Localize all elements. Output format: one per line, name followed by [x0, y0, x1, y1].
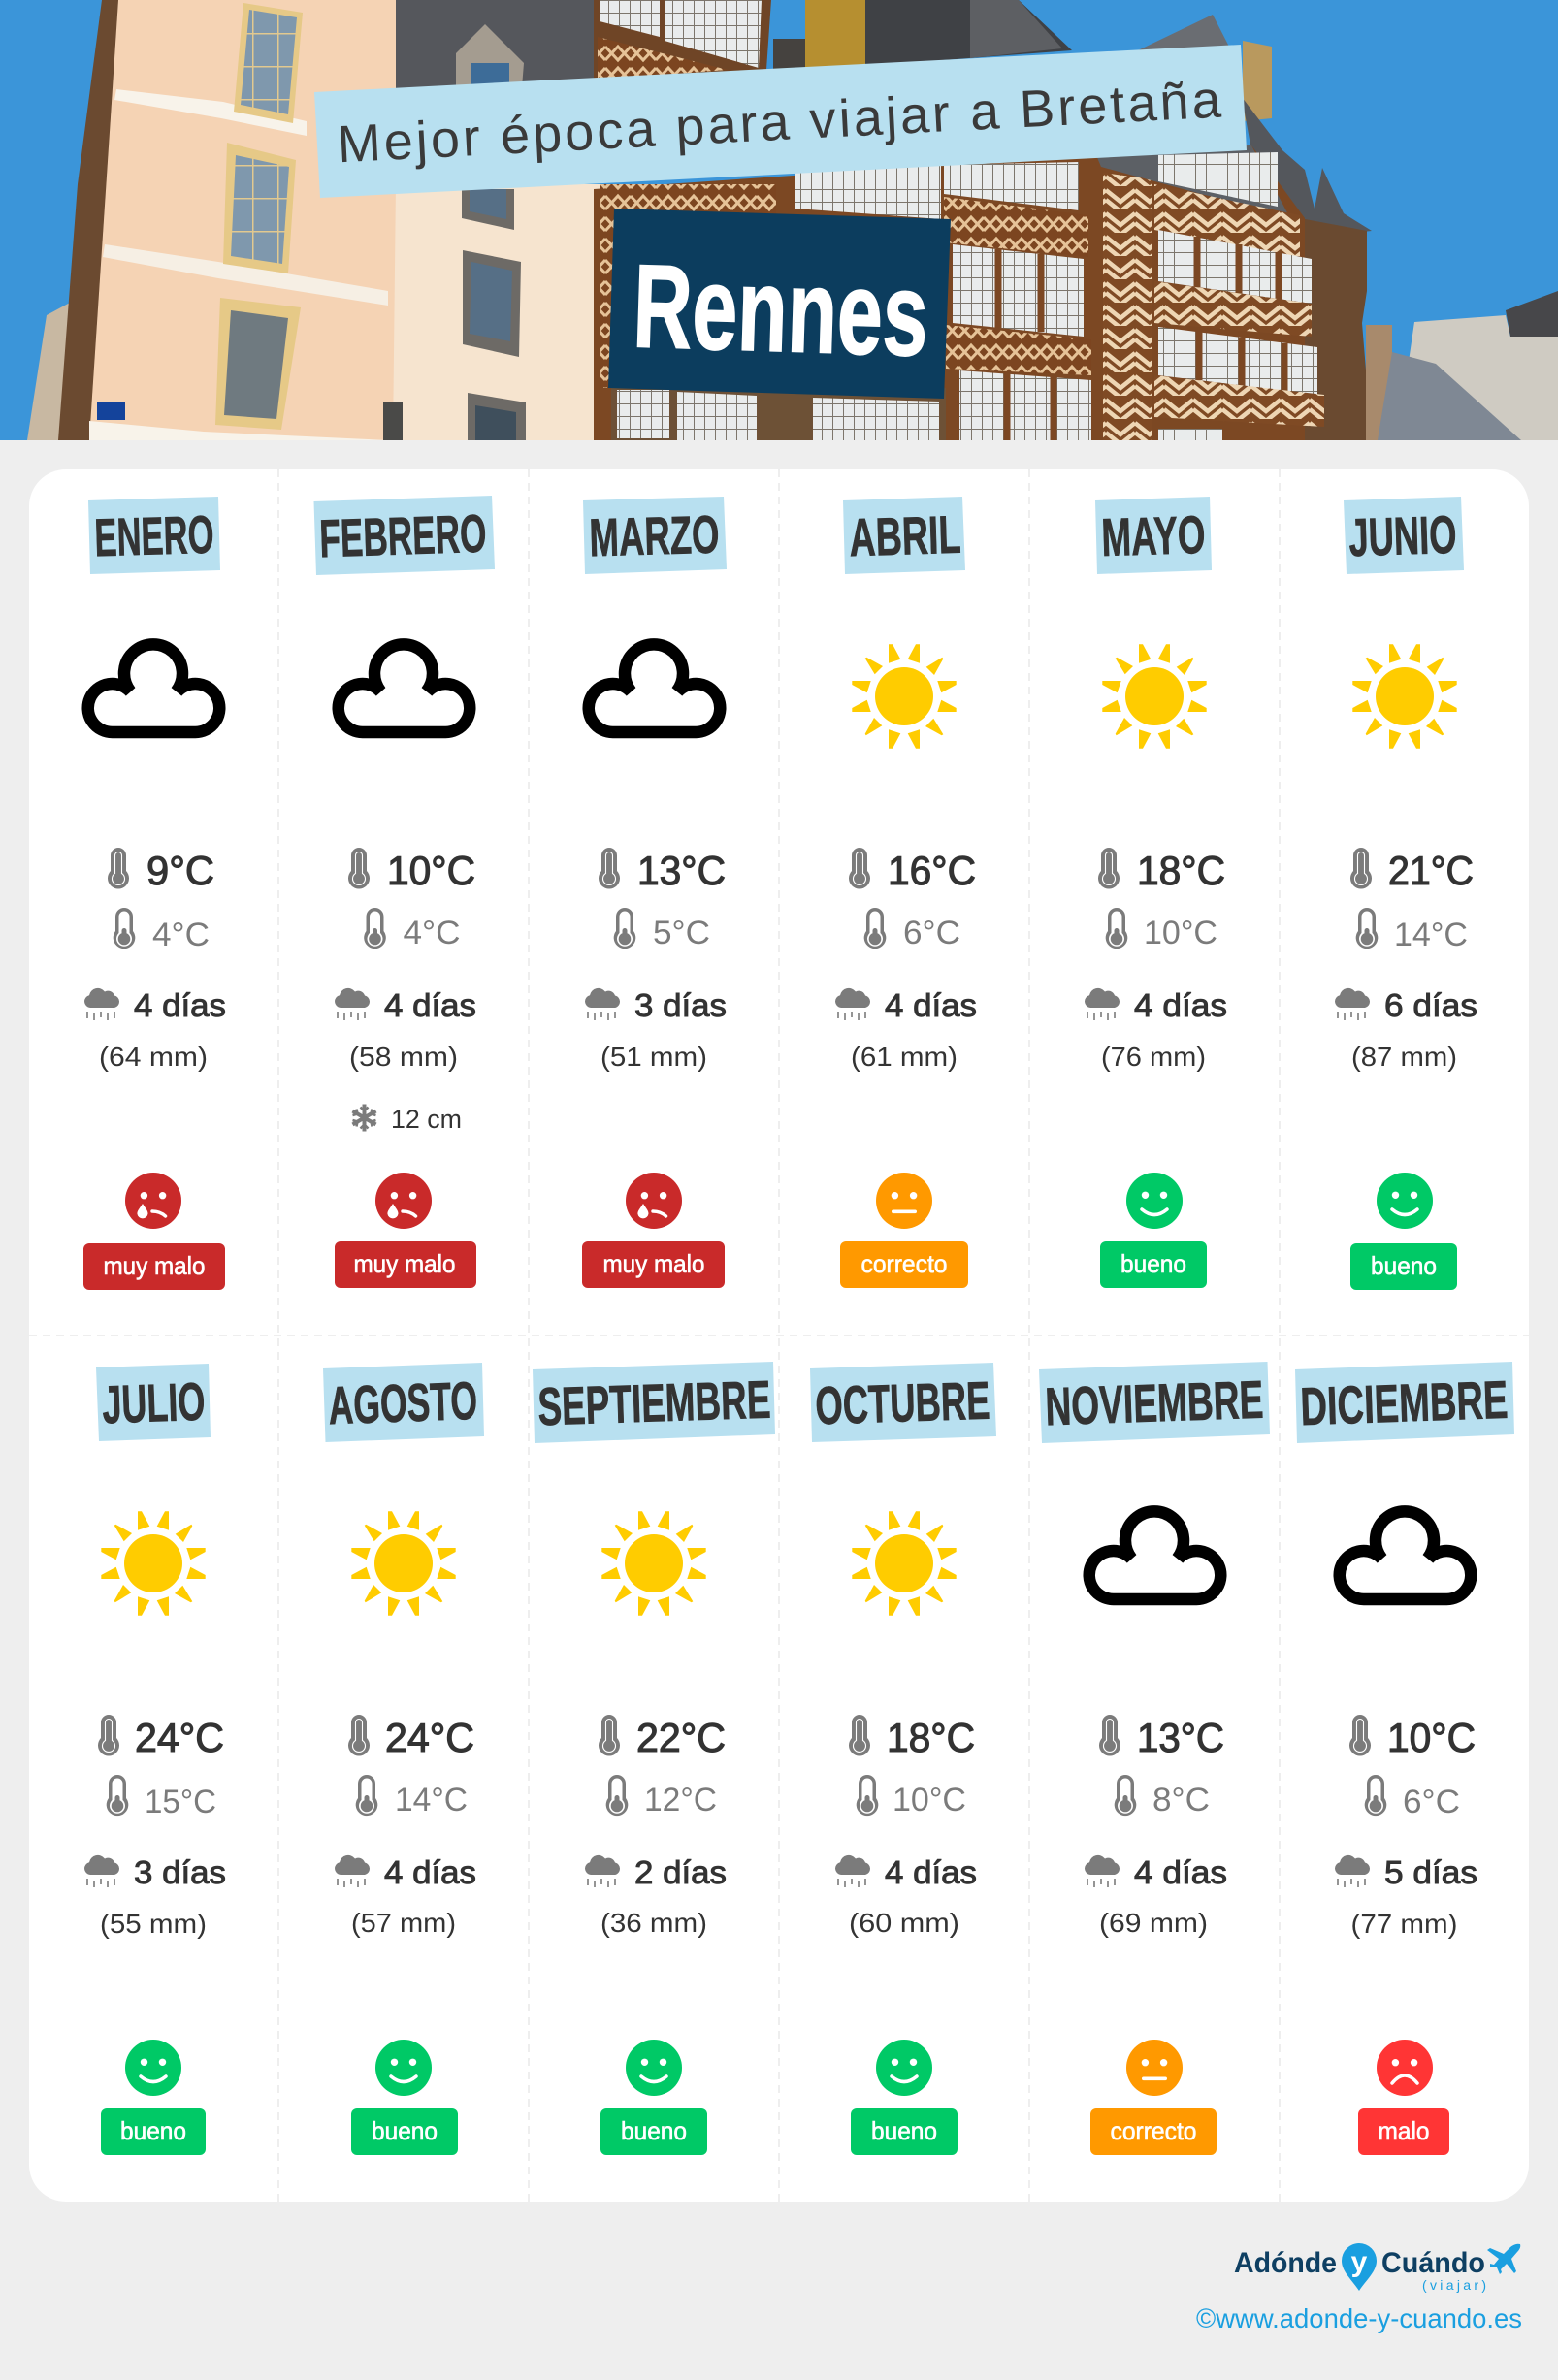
hero photo: half-timbered houses of Rennes [0, 0, 1558, 440]
month tag [843, 497, 965, 574]
min temperature: 5°C [653, 915, 710, 951]
min temperature: 12°C [644, 1782, 717, 1818]
icon: sun [852, 644, 957, 749]
precipitation: (64 mm) [99, 1042, 208, 1072]
max temperature: 10°C [1387, 1715, 1476, 1760]
icon: rain [585, 1855, 620, 1887]
rating badge [840, 1241, 968, 1288]
month tag [96, 1364, 211, 1441]
icon: max thermometer [108, 848, 129, 889]
month: septiembre [533, 1362, 775, 2155]
icon: rain [835, 988, 870, 1020]
precipitation: (61 mm) [851, 1042, 958, 1072]
max temperature: 24°C [385, 1715, 474, 1760]
icon: min thermometer [114, 908, 135, 949]
rating badge: malo [1378, 2116, 1430, 2145]
rating badge: bueno [621, 2116, 687, 2145]
icon: max thermometer [348, 1715, 370, 1756]
month tag: MAYO [1100, 504, 1206, 567]
icon: min thermometer [1106, 908, 1127, 949]
month tag: ABRIL [848, 504, 961, 567]
title banner: Mejor época para viajar a Bretaña [336, 71, 1223, 174]
month: enero [83, 497, 226, 1290]
precipitation: (76 mm) [1101, 1042, 1206, 1072]
icon: max thermometer [1099, 1715, 1120, 1756]
icon: face [375, 1173, 432, 1229]
month tag: FEBRERO [318, 503, 487, 568]
icon: sun [601, 1511, 706, 1616]
icon: face [1126, 2040, 1183, 2096]
rating badge: bueno [871, 2116, 937, 2145]
rating badge: bueno [1120, 1249, 1186, 1278]
icon: min thermometer [356, 1775, 377, 1816]
icon: cloud [589, 644, 720, 732]
month tag: MARZO [589, 504, 720, 567]
website credit: ©www.adonde-y-cuando.es [1196, 2303, 1522, 2333]
min temperature: 6°C [1403, 1784, 1460, 1820]
icon: map pin: y [1351, 2246, 1368, 2278]
month tag: NOVIEMBRE [1044, 1369, 1264, 1436]
rain days: 4 días [1134, 987, 1227, 1023]
icon: rain [84, 988, 119, 1020]
month tag [323, 1363, 484, 1442]
rain days: 4 días [885, 1854, 977, 1890]
rating badge [1350, 1243, 1457, 1290]
min temperature: 6°C [903, 915, 960, 951]
precipitation: (77 mm) [1350, 1909, 1457, 1939]
rating badge: bueno [372, 2116, 438, 2145]
max temperature: 13°C [1137, 1715, 1224, 1760]
icon: min thermometer [606, 1775, 628, 1816]
month tag: JULIO [101, 1371, 206, 1434]
min temperature: 10°C [1144, 915, 1217, 951]
rain days: 5 días [1384, 1854, 1477, 1890]
icon: rain [1085, 988, 1120, 1020]
month tag [1344, 497, 1464, 574]
month tag [314, 496, 495, 575]
month tag [88, 497, 220, 574]
max temperature: 16°C [888, 848, 976, 893]
max temperature: 9°C [146, 848, 214, 893]
snowfall: 12 cm [391, 1105, 462, 1134]
min temperature: 8°C [1152, 1782, 1210, 1818]
icon: min thermometer [1365, 1775, 1386, 1816]
rating badge [851, 2108, 958, 2155]
rating badge [335, 1241, 476, 1288]
icon: sun [101, 1511, 206, 1616]
rating badge [1090, 2108, 1217, 2155]
icon: max thermometer [98, 1715, 119, 1756]
logo: Adónde y Cuándo: Cuándo [1381, 2247, 1485, 2279]
month: marzo [582, 497, 727, 1288]
rating badge [351, 2108, 458, 2155]
month tag [533, 1362, 775, 1443]
rain days: 4 días [885, 987, 977, 1023]
precipitation: (58 mm) [349, 1042, 458, 1072]
icon: plane [1487, 2244, 1520, 2274]
month: mayo [1085, 497, 1227, 1288]
month tag [1095, 497, 1212, 574]
rating badge: muy malo [603, 1249, 704, 1278]
icon: max thermometer [599, 1715, 620, 1756]
min temperature: 4°C [404, 915, 460, 951]
precipitation: (69 mm) [1099, 1908, 1208, 1938]
rain days: 3 días [134, 1854, 226, 1890]
city name block [608, 209, 951, 399]
rain days: 4 días [384, 1854, 476, 1890]
rating badge: correcto [861, 1249, 947, 1278]
icon: max thermometer [1098, 848, 1120, 889]
max temperature: 22°C [636, 1715, 726, 1760]
rating badge [101, 2108, 206, 2155]
icon: face [876, 1173, 932, 1229]
icon: min thermometer [864, 908, 886, 949]
month tag [583, 497, 727, 574]
icon: max thermometer [849, 1715, 870, 1756]
icon: face [626, 1173, 682, 1229]
rating badge [1100, 1241, 1207, 1288]
icon: rain [835, 1855, 870, 1887]
icon: face [1377, 1173, 1433, 1229]
rating badge: bueno [1371, 1251, 1437, 1280]
icon: min thermometer [857, 1775, 878, 1816]
icon: cloud [88, 644, 219, 732]
precipitation: (57 mm) [351, 1908, 456, 1938]
month: febrero [314, 496, 495, 1288]
icon: min thermometer [364, 908, 386, 949]
max temperature: 18°C [887, 1715, 975, 1760]
rating badge [600, 2108, 707, 2155]
icon: max thermometer [348, 848, 370, 889]
month: noviembre [1039, 1362, 1270, 2155]
icon: sun [1102, 644, 1207, 749]
rain days: 2 días [634, 1854, 727, 1890]
month: julio [84, 1364, 226, 2155]
month: abril [835, 497, 977, 1288]
rain days: 4 días [384, 987, 476, 1023]
logo: Adónde y Cuándo: Adónde [1234, 2247, 1337, 2279]
rating badge: correcto [1110, 2116, 1197, 2145]
icon: face [1126, 1173, 1183, 1229]
max temperature: 13°C [637, 848, 726, 893]
month: junio [1335, 497, 1477, 1290]
rating badge [83, 1243, 225, 1290]
icon: min thermometer [614, 908, 635, 949]
month tag: OCTUBRE [814, 1370, 990, 1435]
icon: cloud [339, 644, 470, 732]
icon: cloud [1340, 1511, 1471, 1599]
month: agosto [323, 1363, 484, 2155]
rating badge [582, 1241, 725, 1288]
icon: rain [1085, 1855, 1120, 1887]
icon: face [125, 1173, 181, 1229]
icon: map pin [1342, 2243, 1377, 2291]
icon: face [626, 2040, 682, 2096]
panel: climate calendar card [29, 469, 1529, 2202]
icon: sun [351, 1511, 456, 1616]
rain days: 4 días [1134, 1854, 1227, 1890]
precipitation: (87 mm) [1351, 1042, 1457, 1072]
icon: min thermometer [107, 1775, 128, 1816]
icon: rain [1335, 988, 1370, 1020]
max temperature: 18°C [1137, 848, 1225, 893]
rating badge [1358, 2108, 1449, 2155]
city name block: Rennes [632, 240, 930, 381]
icon: face [125, 2040, 181, 2096]
icon: face [1377, 2040, 1433, 2096]
icon: rain [1335, 1855, 1370, 1887]
icon: max thermometer [1350, 848, 1372, 889]
max temperature: 10°C [387, 848, 475, 893]
precipitation: (60 mm) [849, 1908, 959, 1938]
icon: min thermometer [1115, 1775, 1136, 1816]
max temperature: 24°C [135, 1715, 224, 1760]
min temperature: 15°C [145, 1784, 216, 1820]
month: diciembre [1295, 1362, 1514, 2155]
icon: snowflake [353, 1104, 376, 1131]
month tag: AGOSTO [327, 1370, 478, 1435]
max temperature: 21°C [1388, 848, 1474, 893]
icon: face [375, 2040, 432, 2096]
min temperature: 14°C [1394, 917, 1468, 953]
min temperature: 14°C [395, 1782, 468, 1818]
month: octubre [810, 1363, 996, 2155]
rating badge: muy malo [353, 1249, 456, 1278]
month tag: JUNIO [1347, 504, 1457, 567]
precipitation: (51 mm) [600, 1042, 707, 1072]
min temperature: 4°C [152, 917, 210, 953]
icon: max thermometer [1349, 1715, 1371, 1756]
month tag [810, 1363, 996, 1442]
icon: max thermometer [849, 848, 870, 889]
logo: Adónde y Cuándo [1234, 2243, 1520, 2293]
rain days: 3 días [634, 987, 727, 1023]
month tag [1039, 1362, 1270, 1443]
precipitation: (36 mm) [600, 1908, 707, 1938]
icon: sun [1352, 644, 1457, 749]
rain days: 4 días [134, 987, 226, 1023]
title banner [314, 45, 1247, 198]
rating badge: muy malo [103, 1251, 206, 1280]
icon: rain [335, 1855, 370, 1887]
icon: rain [585, 988, 620, 1020]
month tag: SEPTIEMBRE [536, 1369, 771, 1436]
rain days: 6 días [1384, 987, 1477, 1023]
logo: Adónde y Cuándo: (viajar) [1422, 2277, 1486, 2293]
icon: max thermometer [599, 848, 620, 889]
precipitation: (55 mm) [100, 1909, 207, 1939]
icon: sun [852, 1511, 957, 1616]
icon: face [876, 2040, 932, 2096]
min temperature: 10°C [893, 1782, 966, 1818]
icon: rain [84, 1855, 119, 1887]
icon: cloud [1089, 1511, 1220, 1599]
rating badge: bueno [120, 2116, 186, 2145]
icon: rain [335, 988, 370, 1020]
icon: min thermometer [1356, 908, 1378, 949]
month tag: ENERO [94, 504, 214, 567]
